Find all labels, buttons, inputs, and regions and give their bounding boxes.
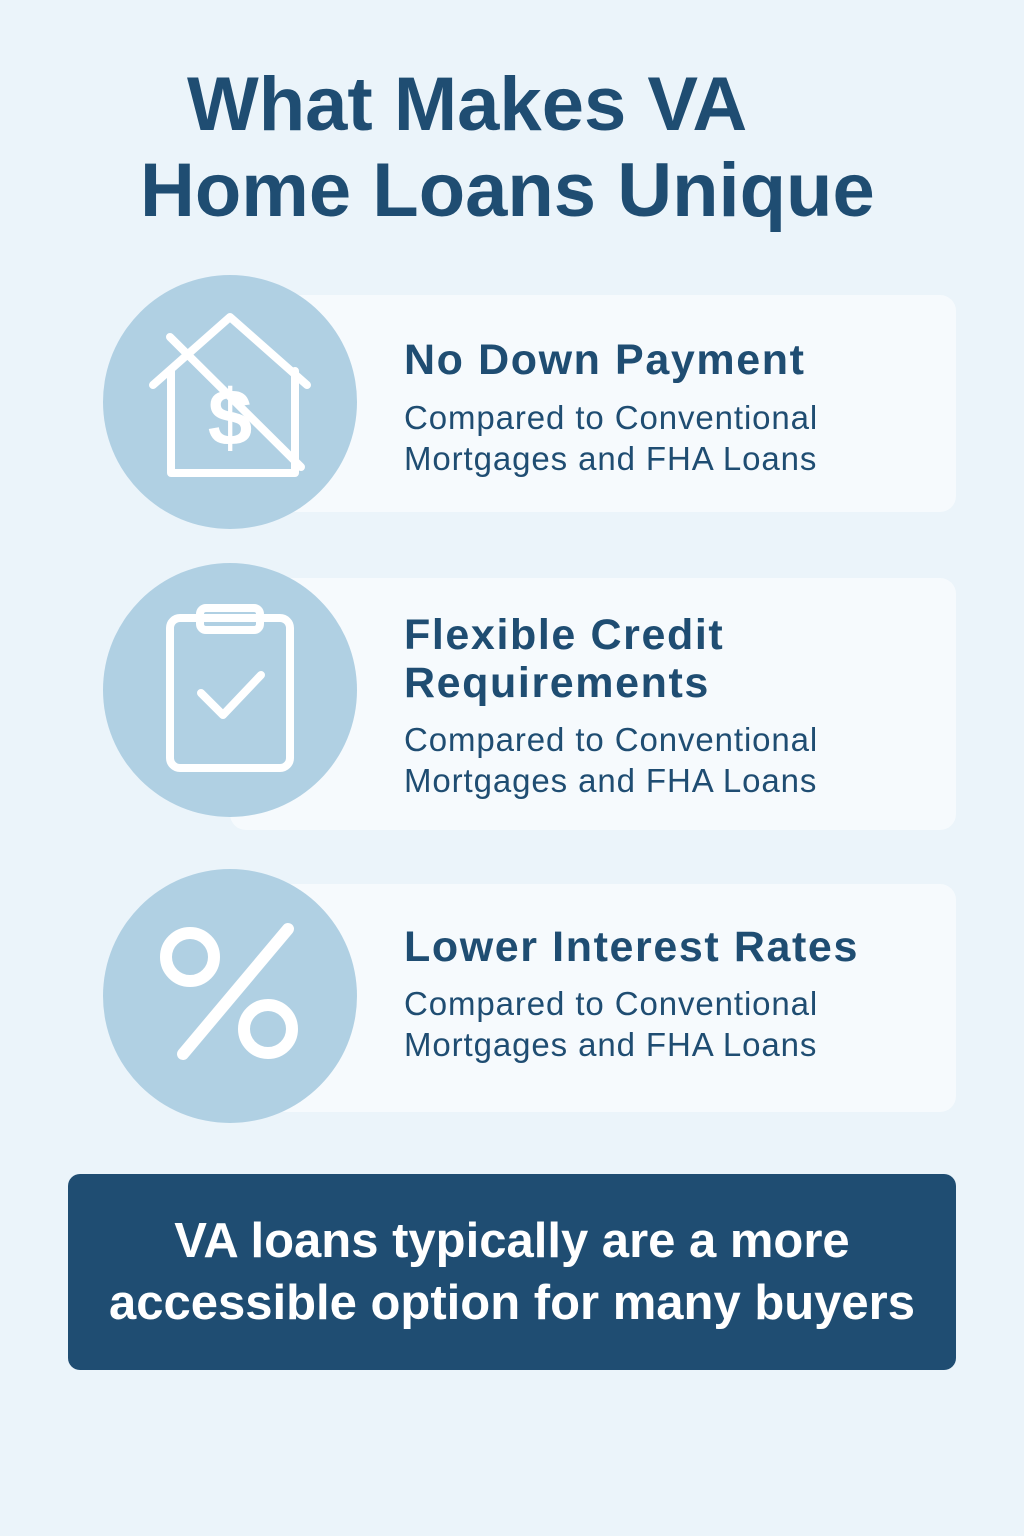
text: comparison: Compared to Conventional <box>404 721 818 758</box>
text: comparison: Compared to Conventional <box>404 985 818 1022</box>
card: lower interest <box>230 884 956 1112</box>
card: flexible credit <box>230 578 956 830</box>
text: comparison: Mortgages and FHA Loans <box>404 1026 817 1063</box>
heading: flexible credit: Requirements <box>404 659 710 707</box>
icon: house with dollar crossed out <box>103 275 357 529</box>
text: comparison <box>404 399 818 477</box>
icon: clipboard check <box>103 563 357 817</box>
title <box>140 62 875 233</box>
text: comparison: Mortgages and FHA Loans <box>404 762 817 799</box>
heading: flexible credit <box>404 611 724 707</box>
title: What Makes VA <box>187 62 747 147</box>
banner: conclusion <box>68 1174 956 1370</box>
text: comparison <box>404 985 818 1063</box>
banner: conclusion: accessible option for many buyers <box>109 1276 915 1330</box>
card: no down payment <box>230 295 956 512</box>
icon: house with dollar crossed out: $ <box>208 373 252 462</box>
icon: percent <box>103 869 357 1123</box>
heading: no down payment: No Down Payment <box>404 336 806 384</box>
text: comparison <box>404 721 818 799</box>
title: Home Loans Unique <box>140 148 875 233</box>
text: comparison: Mortgages and FHA Loans <box>404 440 817 477</box>
heading: lower interest: Lower Interest Rates <box>404 923 859 971</box>
banner: conclusion: VA loans typically are a more <box>174 1214 850 1268</box>
text: comparison: Compared to Conventional <box>404 399 818 436</box>
heading: flexible credit: Flexible Credit <box>404 611 724 659</box>
